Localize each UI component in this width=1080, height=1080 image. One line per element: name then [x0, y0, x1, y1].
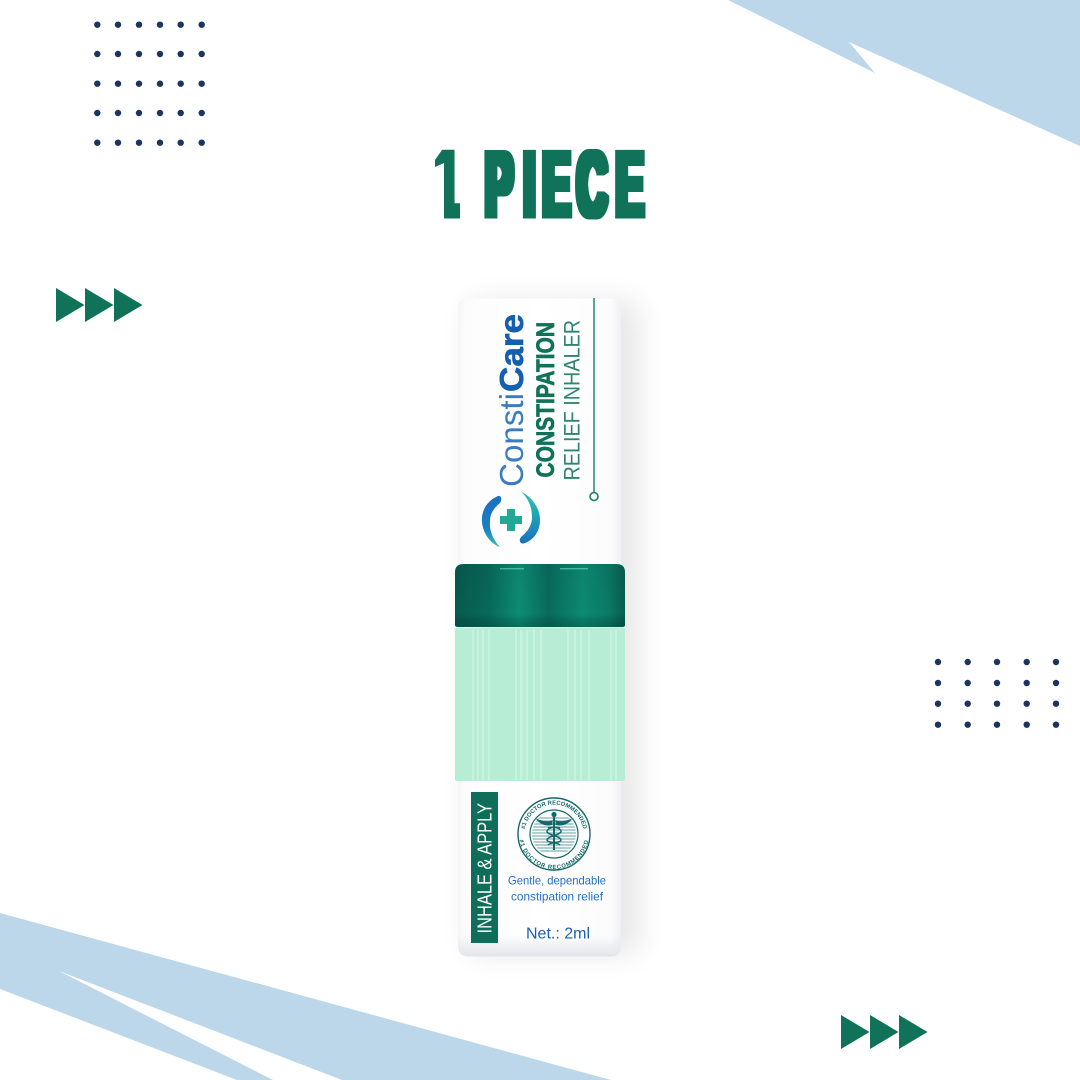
doctor recommended seal [517, 797, 591, 871]
net volume: Net.: 2ml [526, 926, 590, 942]
mint grip section [455, 628, 625, 781]
inhaler product [455, 296, 644, 960]
tagline: constipation relief [511, 890, 604, 904]
green usage tag: INHALE & APPLY [474, 803, 496, 934]
tagline [508, 874, 606, 904]
seal text [520, 800, 588, 869]
brand name: Consti [493, 393, 530, 487]
caduceus icon [536, 812, 572, 850]
decorative shape: bottom left blue streaks [0, 913, 611, 1080]
decorative shape: top right blue corner [728, 0, 1080, 146]
label line with circle [590, 298, 598, 500]
lower white body [458, 781, 621, 956]
seal text: #1 DOCTOR RECOMMENDED [520, 840, 588, 869]
arrows: left triple triangle [56, 288, 142, 322]
dark green collar [455, 564, 625, 627]
brand name [493, 314, 530, 487]
inhaler shadow [468, 300, 640, 955]
dot grid: top left [94, 22, 205, 146]
upper white body [458, 298, 621, 570]
seal text: #1 DOCTOR RECOMMENDED [521, 800, 587, 829]
arrows: bottom right triple triangle [841, 1015, 928, 1049]
dot grid: right [935, 659, 1059, 728]
tagline: Gentle, dependable [508, 874, 606, 888]
brand name: Care [493, 314, 530, 392]
logo [482, 492, 540, 547]
product name bold: CONSTIPATION [532, 322, 560, 478]
product name light: RELIEF INHALER [560, 320, 584, 480]
title: 1 PIECE [436, 133, 644, 235]
